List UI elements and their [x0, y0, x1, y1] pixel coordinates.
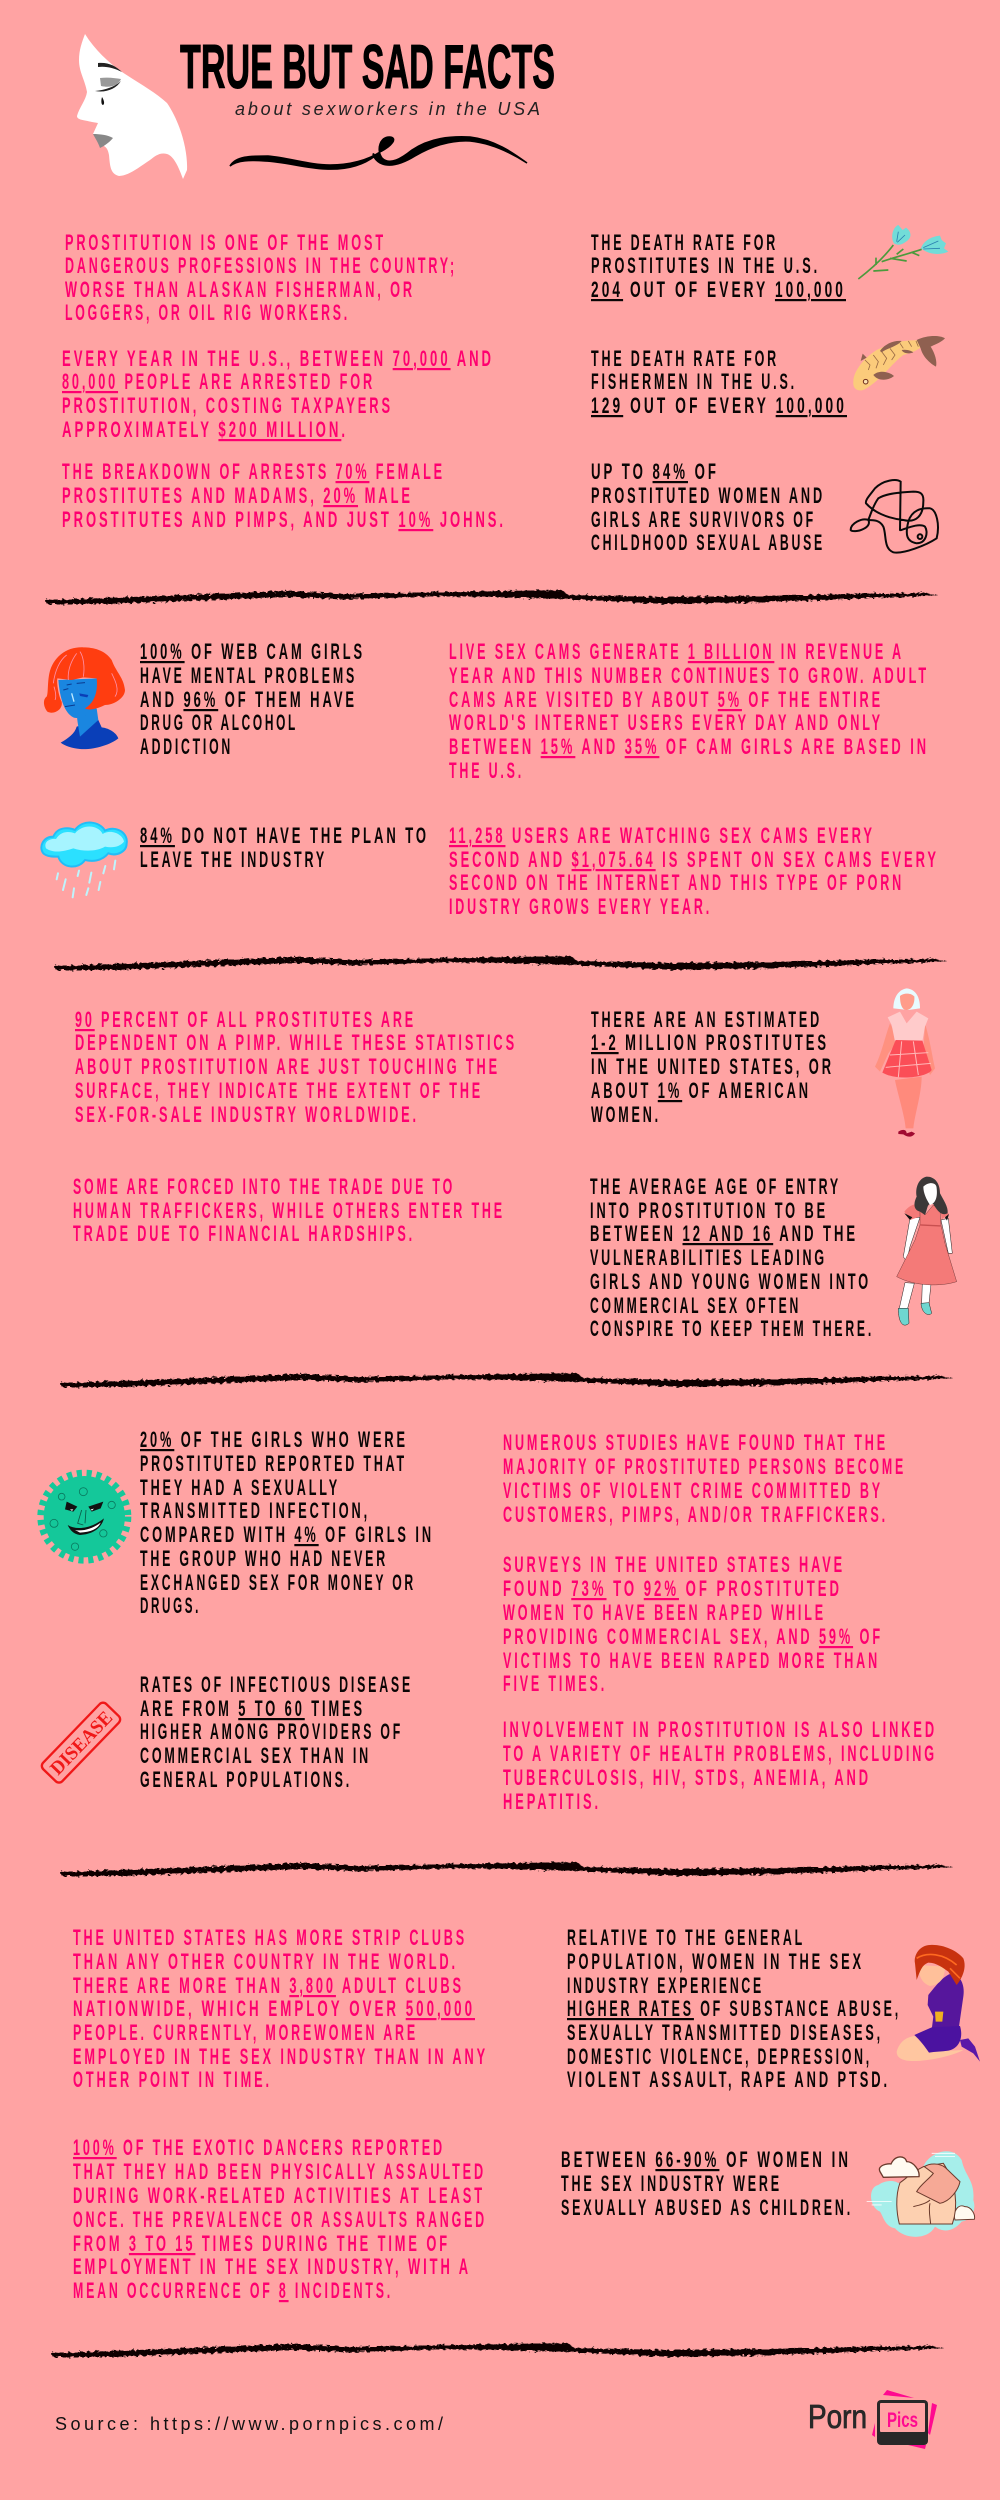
text: estimated prostitutes: THERE ARE AN ESTIMATED [591, 1007, 822, 1032]
text: sexually transmitted infection: TRANSMITTED INFECTION, [140, 1498, 370, 1523]
logo: PornPics: Pics [887, 2409, 918, 2432]
text: violent crime [503, 1430, 906, 1527]
icon: woman in pink dress [897, 1177, 957, 1325]
icon: evil virus [42, 1474, 127, 1559]
text: average age of entry: COMMERCIAL SEX OFTEN [590, 1293, 801, 1318]
text: sexually transmitted infection: EXCHANGED SEX FOR MONEY OR [140, 1570, 416, 1595]
text: web cam girls: AND 96% OF THEM HAVE [140, 687, 357, 712]
divider [51, 2343, 944, 2357]
text: prostitute death rate: THE DEATH RATE FOR [591, 230, 778, 255]
text: breakdown of arrests: THE BREAKDOWN OF ARRESTS 70% FEMALE [62, 459, 445, 484]
text: most dangerous professions: DANGEROUS PROFESSIONS IN THE COUNTRY; [65, 253, 457, 278]
icon: disease stamp: DISEASE [46, 1707, 117, 1780]
text: no plan to leave: 84% DO NOT HAVE THE PLAN TO [140, 823, 429, 848]
divider [60, 1373, 953, 1387]
text: higher rates: INDUSTRY EXPERIENCE [567, 1973, 764, 1998]
text: dependent on a pimp [75, 1007, 517, 1127]
subtitle: about sexworkers in the USA [235, 99, 540, 119]
text: average age of entry: BETWEEN 12 AND 16 AND THE [590, 1221, 858, 1246]
text: strip clubs: THAN ANY OTHER COUNTRY IN THE WORLD. [73, 1949, 458, 1974]
text: fishermen death rate: FISHERMEN IN THE U.S. [591, 369, 797, 394]
icon: fish [853, 336, 945, 390]
text: breakdown of arrests: PROSTITUTES AND MADAMS, 20% MALE [62, 483, 413, 508]
text: strip clubs: OTHER POINT IN TIME. [73, 2067, 272, 2092]
text: rape surveys: FIVE TIMES. [503, 1671, 607, 1696]
divider [45, 590, 938, 604]
text: most dangerous professions: LOGGERS, OR OIL RIG WORKERS. [65, 300, 350, 325]
text: live sex cams revenue: LIVE SEX CAMS GENERATE 1 BILLION IN REVENUE A [449, 639, 904, 664]
text: no plan to leave [140, 823, 429, 872]
divider [54, 956, 947, 970]
text: web cam girls: 100% OF WEB CAM GIRLS [140, 639, 365, 664]
text: most dangerous professions: PROSTITUTION IS ONE OF THE MOST [65, 230, 386, 255]
text: health problems [503, 1717, 937, 1814]
text: prostitute death rate: 204 OUT OF EVERY 100,000 [591, 277, 846, 302]
text: fishermen death rate [591, 346, 847, 418]
text: infectious disease rates: GENERAL POPULATIONS. [140, 1767, 352, 1792]
text: web cam girls: ADDICTION [140, 734, 233, 759]
text: strip clubs [73, 1925, 488, 2092]
text: dependent on a pimp: DEPENDENT ON A PIMP. WHILE THESE STATISTICS [75, 1030, 517, 1055]
text: exotic dancers: MEAN OCCURRENCE OF 8 INCIDENTS. [73, 2278, 393, 2303]
text: childhood abuse: UP TO 84% OF [591, 459, 719, 484]
text: infectious disease rates: COMMERCIAL SEX THAN IN [140, 1743, 371, 1768]
text: exotic dancers: DURING WORK-RELATED ACTIVITIES AT LEAST [73, 2183, 485, 2208]
text: dependent on a pimp: SEX-FOR-SALE INDUSTRY WORLDWIDE. [75, 1102, 419, 1127]
text: childhood abuse [591, 459, 825, 555]
text: dependent on a pimp: 90 PERCENT OF ALL PROSTITUTES ARE [75, 1007, 416, 1032]
text: forced into trade: TRADE DUE TO FINANCIAL HARDSHIPS. [73, 1221, 415, 1246]
icon: scribble [851, 480, 938, 553]
text: estimated prostitutes: 1-2 MILLION PROSTITUTES [591, 1030, 829, 1055]
text: breakdown of arrests [62, 459, 506, 532]
text: web cam girls [140, 639, 365, 759]
text: sexually transmitted infection: THEY HAD A SEXUALLY [140, 1475, 340, 1500]
text: users watching [449, 823, 939, 919]
text: higher rates [567, 1925, 901, 2092]
text: estimated prostitutes [591, 1007, 834, 1127]
text: infectious disease rates: ARE FROM 5 TO 60 TIMES [140, 1696, 365, 1721]
text: strip clubs: THERE ARE MORE THAN 3,800 ADULT CLUBS [73, 1973, 464, 1998]
text: abused as children: BETWEEN 66-90% OF WOMEN IN [561, 2147, 851, 2172]
text: health problems: HEPATITIS. [503, 1789, 601, 1814]
text: dependent on a pimp: SURFACE, THEY INDICATE THE EXTENT OF THE [75, 1078, 483, 1103]
text: yearly arrests: PROSTITUTION, COSTING TAXPAYERS [62, 393, 393, 418]
logo: PornPics: Porn [808, 2398, 867, 2435]
text: higher rates: RELATIVE TO THE GENERAL [567, 1925, 805, 1950]
text: forced into trade: HUMAN TRAFFICKERS, WHILE OTHERS ENTER THE [73, 1198, 505, 1223]
text: forced into trade [73, 1174, 505, 1246]
text: childhood abuse: CHILDHOOD SEXUAL ABUSE [591, 530, 825, 555]
text: estimated prostitutes: IN THE UNITED STATES, OR [591, 1054, 834, 1079]
icon: body and hand on blue blob [867, 2151, 975, 2237]
source: Source: https://www.pornpics.com/ [55, 2414, 443, 2434]
text: live sex cams revenue: CAMS ARE VISITED BY ABOUT 5% OF THE ENTIRE [449, 687, 883, 712]
text: infectious disease rates [140, 1672, 413, 1792]
text: average age of entry: VULNERABILITIES LEADING [590, 1245, 827, 1270]
text: estimated prostitutes: ABOUT 1% OF AMERICAN [591, 1078, 811, 1103]
text: exotic dancers: ONCE. THE PREVALENCE OR ASSAULTS RANGED [73, 2207, 487, 2232]
text: infectious disease rates: HIGHER AMONG PROVIDERS OF [140, 1719, 403, 1744]
text: rape surveys [503, 1552, 883, 1696]
text: strip clubs: NATIONWIDE, WHICH EMPLOY OVER 500,000 [73, 1996, 475, 2021]
text: yearly arrests: APPROXIMATELY $200 MILLION. [62, 417, 348, 442]
text: abused as children [561, 2147, 853, 2220]
text: sexually transmitted infection: 20% OF THE GIRLS WHO WERE [140, 1427, 408, 1452]
text: infectious disease rates: RATES OF INFECTIOUS DISEASE [140, 1672, 413, 1697]
text: sexually transmitted infection: THE GROUP WHO HAD NEVER [140, 1546, 388, 1571]
text: sexually transmitted infection: DRUGS. [140, 1593, 201, 1618]
decorative swoosh [230, 137, 527, 169]
text: yearly arrests: 80,000 PEOPLE ARE ARRESTED FOR [62, 369, 375, 394]
title: TRUE BUT SAD FACTS [180, 33, 555, 102]
icon: kneeling woman [897, 1945, 980, 2062]
text: fishermen death rate: THE DEATH RATE FOR [591, 346, 779, 371]
text: prostitute death rate [591, 230, 846, 302]
text: breakdown of arrests: PROSTITUTES AND PIMPS, AND JUST 10% JOHNS. [62, 507, 506, 532]
text: dependent on a pimp: ABOUT PROSTITUTION ARE JUST TOUCHING THE [75, 1054, 500, 1079]
text: exotic dancers [73, 2135, 487, 2303]
text: average age of entry: INTO PROSTITUTION TO BE [590, 1198, 828, 1223]
text: strip clubs: EMPLOYED IN THE SEX INDUSTRY THAN IN ANY [73, 2044, 488, 2069]
text: exotic dancers: 100% OF THE EXOTIC DANCERS REPORTED [73, 2135, 445, 2160]
text: childhood abuse: GIRLS ARE SURVIVORS OF [591, 507, 816, 532]
text: most dangerous professions [65, 230, 457, 325]
text: fishermen death rate: 129 OUT OF EVERY 100,000 [591, 393, 847, 418]
text: live sex cams revenue [449, 639, 929, 783]
text: web cam girls: HAVE MENTAL PROBLEMS [140, 663, 357, 688]
text: sexually transmitted infection [140, 1427, 434, 1618]
text: exotic dancers: THAT THEY HAD BEEN PHYSICALLY ASSAULTED [73, 2159, 486, 2184]
text: live sex cams revenue: THE U.S. [449, 758, 524, 783]
text: strip clubs: PEOPLE. CURRENTLY, MOREWOMEN ARE [73, 2020, 418, 2045]
text: no plan to leave: LEAVE THE INDUSTRY [140, 847, 327, 872]
text: average age of entry [590, 1174, 874, 1341]
text: yearly arrests: EVERY YEAR IN THE U.S., BETWEEN 70,000 AND [62, 346, 494, 371]
text: rape surveys: FOUND 73% TO 92% OF PROSTITUTED [503, 1576, 842, 1601]
icon: woman in red skirt [875, 988, 935, 1137]
text: sexually transmitted infection: COMPARED WITH 4% OF GIRLS IN [140, 1522, 434, 1547]
text: yearly arrests [62, 346, 494, 442]
text: forced into trade: SOME ARE FORCED INTO THE TRADE DUE TO [73, 1174, 455, 1199]
text: exotic dancers: FROM 3 TO 15 TIMES DURING THE TIME OF [73, 2231, 450, 2256]
text: prostitute death rate: PROSTITUTES IN THE U.S. [591, 253, 820, 278]
icon: flower [858, 225, 948, 279]
text: exotic dancers: EMPLOYMENT IN THE SEX INDUSTRY, WITH A [73, 2254, 471, 2279]
text: most dangerous professions: WORSE THAN ALASKAN FISHERMAN, OR [65, 277, 415, 302]
icon: crying woman face [77, 34, 187, 179]
text: childhood abuse: PROSTITUTED WOMEN AND [591, 483, 825, 508]
icon: sad blue girl [44, 647, 125, 749]
text: estimated prostitutes: WOMEN. [591, 1102, 661, 1127]
text: users watching: IDUSTRY GROWS EVERY YEAR. [449, 894, 712, 919]
text: abused as children: THE SEX INDUSTRY WERE [561, 2171, 782, 2196]
icon: rain cloud [41, 822, 127, 897]
text: strip clubs: THE UNITED STATES HAS MORE STRIP CLUBS [73, 1925, 467, 1950]
text: web cam girls: DRUG OR ALCOHOL [140, 710, 298, 735]
logo: PornPics [808, 2390, 937, 2449]
divider [60, 1862, 953, 1876]
text: sexually transmitted infection: PROSTITUTED REPORTED THAT [140, 1451, 407, 1476]
